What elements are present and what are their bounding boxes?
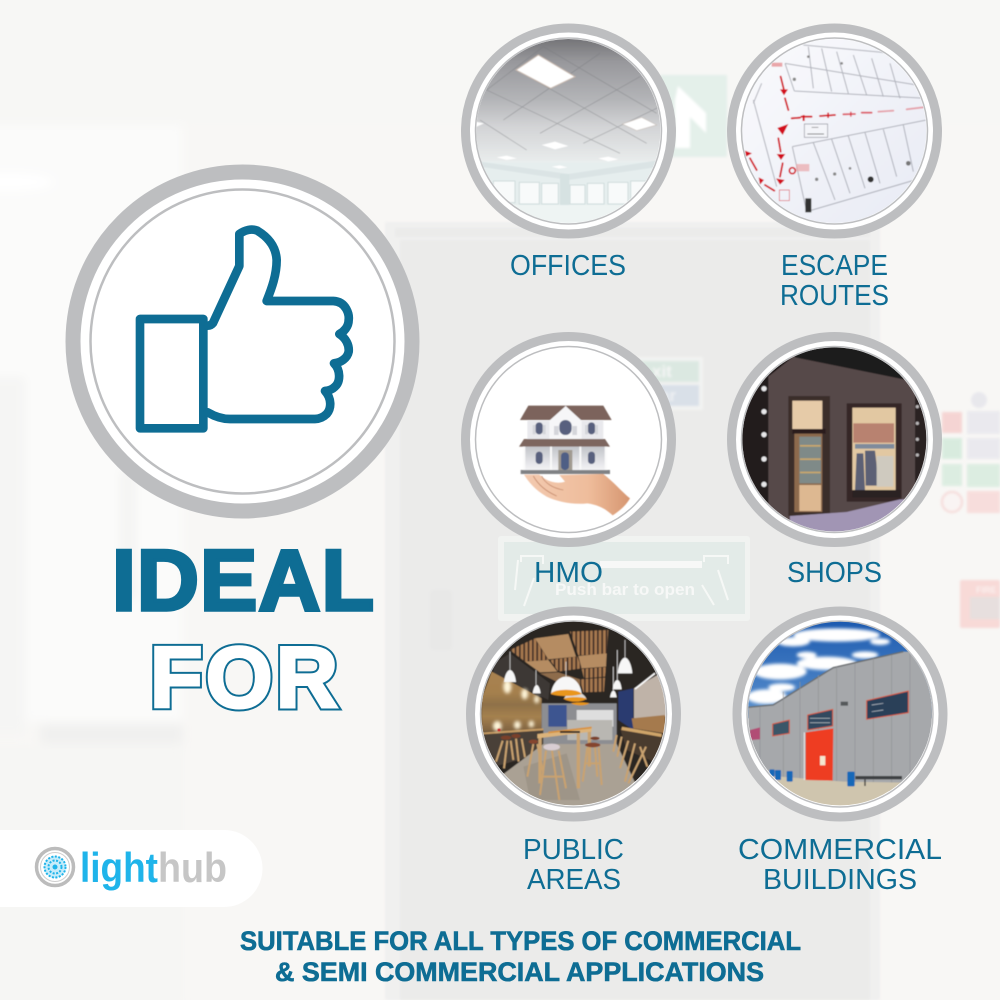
- item: offices: [466, 28, 672, 234]
- logo wordmark: hub: hub: [158, 844, 227, 891]
- icon: thumbs up: [140, 230, 349, 428]
- background fire exit sign: ar: [660, 386, 676, 405]
- background push bar sign: [498, 536, 750, 621]
- background exit sign with arrow: [660, 75, 727, 157]
- background fire alarm box: [960, 580, 1000, 628]
- logo pill: lighthub: [0, 830, 262, 907]
- logo wordmark: light: light: [80, 844, 158, 891]
- background push bar sign: Push bar to open: [555, 581, 695, 599]
- photo: restaurant interior: [481, 622, 666, 806]
- label: escape routes: ESCAPE: [781, 250, 888, 282]
- footer text: [240, 926, 801, 987]
- label: commercial buildings: COMMERCIAL: [738, 834, 942, 866]
- photo: industrial building: [745, 618, 935, 807]
- icon: house on hand: [519, 406, 630, 515]
- large circle with thumbs up icon: [73, 172, 412, 511]
- background fire exit sign: [620, 357, 703, 410]
- footer text: & SEMI COMMERCIAL APPLICATIONS: [275, 957, 764, 987]
- photo: shop front: [740, 347, 933, 537]
- background fire alarm box: FIRE: [976, 585, 997, 595]
- label: escape routes: [780, 250, 889, 312]
- heading: FOR: FOR: [150, 630, 338, 726]
- item: escape routes: [732, 28, 938, 234]
- label: escape routes: ROUTES: [780, 280, 889, 312]
- photo: escape route floor plan: [740, 37, 930, 227]
- label: offices: OFFICES: [510, 250, 626, 282]
- item: public areas: [470, 611, 676, 817]
- label: HMO: HMO: [534, 557, 603, 589]
- footer text: SUITABLE FOR ALL TYPES OF COMMERCIAL: [240, 926, 801, 956]
- label: commercial buildings: [738, 834, 942, 896]
- item: shops: [732, 336, 938, 542]
- label: commercial buildings: BUILDINGS: [763, 864, 917, 896]
- background fire exit sign: xit: [652, 362, 672, 381]
- heading: IDEAL: IDEAL: [112, 533, 374, 629]
- label: public areas: [523, 834, 624, 896]
- item: commercial buildings: [737, 611, 943, 817]
- photo: office ceiling: [473, 37, 663, 225]
- label: shops: SHOPS: [787, 557, 882, 589]
- heading: FOR: FOR: [150, 630, 338, 726]
- background safety signage on right wall: [942, 392, 1000, 513]
- item: HMO: [466, 336, 672, 542]
- label: public areas: AREAS: [527, 864, 621, 896]
- icon: logo ring with dots: [36, 848, 74, 886]
- label: public areas: PUBLIC: [523, 834, 624, 866]
